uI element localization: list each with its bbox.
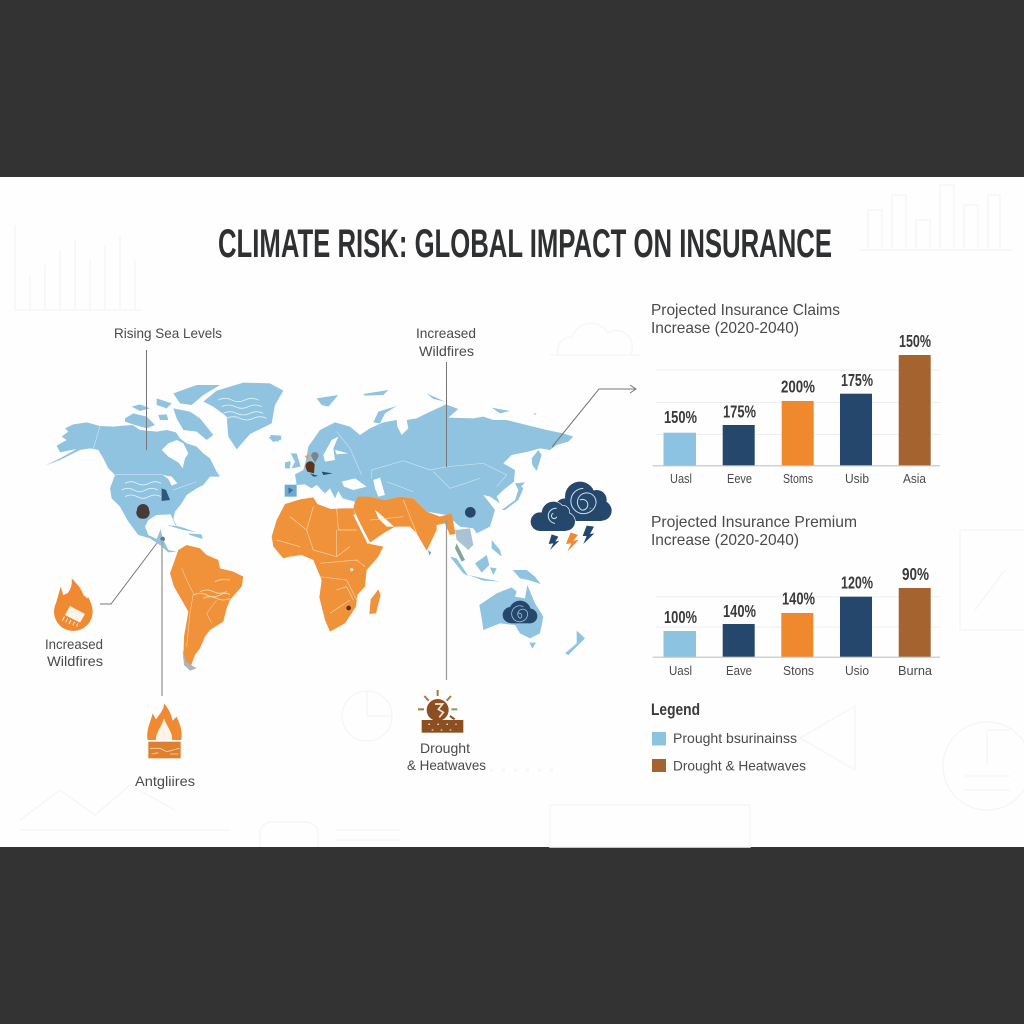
bar chart: premium: 90% xyxy=(902,564,929,584)
callout line: drought xyxy=(446,520,448,680)
South America xyxy=(170,545,243,668)
label: antgliires: Antgliires xyxy=(135,773,195,789)
Greenland xyxy=(203,383,283,449)
borders xyxy=(277,500,417,613)
Great Lakes xyxy=(163,475,177,486)
Southeast Asia xyxy=(455,528,473,550)
heading: premium chart xyxy=(651,514,857,549)
Patagonia tip xyxy=(183,649,197,671)
icon: australia cloud xyxy=(503,601,537,623)
bar chart: premium xyxy=(653,564,940,678)
bar chart: premium: 140% xyxy=(782,589,815,609)
Sakhalin and Japan xyxy=(502,450,542,510)
North America mainland xyxy=(45,422,220,552)
Red Sea xyxy=(353,514,370,544)
Baltic Sea xyxy=(323,437,348,462)
label: drought and heatwaves: & Heatwaves xyxy=(407,757,486,773)
Hudson Bay xyxy=(162,440,188,468)
map: North America xyxy=(45,385,220,552)
bar chart: claims: 150% xyxy=(664,407,697,427)
label: increased wildfires north: Wildfires xyxy=(419,343,474,359)
Caribbean islands xyxy=(167,525,203,539)
bar chart: claims: Stoms xyxy=(783,472,813,486)
dot markers xyxy=(465,507,476,518)
heading: premium chart: Increase (2020-2040) xyxy=(651,532,799,549)
label: increased wildfires left: Wildfires xyxy=(47,653,103,669)
Black Sea xyxy=(342,478,367,490)
icon: wildfire badge xyxy=(54,578,93,631)
Eurasia mainland xyxy=(295,404,573,533)
label: increased wildfires north: Increased xyxy=(416,325,476,341)
callout line: increased wildfires north xyxy=(446,362,448,467)
white panel xyxy=(0,177,1024,847)
bar chart: premium: 120% xyxy=(841,573,873,593)
icon: sun over dry ground xyxy=(418,690,463,733)
heading: claims chart xyxy=(651,302,840,337)
label: increased wildfires left xyxy=(45,636,103,669)
Madagascar xyxy=(369,589,381,614)
Arabia and South Asia xyxy=(353,497,455,551)
waves and borders xyxy=(93,426,197,498)
dark spots xyxy=(136,504,150,519)
label: increased wildfires north xyxy=(416,325,476,359)
bar chart: claims: Eeve xyxy=(727,472,752,486)
bar chart: premium: 140% xyxy=(723,601,756,621)
bar chart: claims xyxy=(653,331,940,486)
Malay peninsula xyxy=(455,543,465,562)
Africa xyxy=(272,497,383,632)
bar chart: claims: Asia xyxy=(903,472,926,486)
callout line: antgliires xyxy=(161,540,163,696)
Persian Gulf xyxy=(375,510,394,527)
bar chart: claims: Uasl xyxy=(670,472,692,486)
legend xyxy=(651,701,806,774)
legend: Legend xyxy=(651,701,700,719)
Iberia xyxy=(285,485,297,497)
bar chart: claims: Usib xyxy=(845,472,869,486)
South America rivers xyxy=(182,568,230,647)
map: Oceania xyxy=(450,540,585,655)
world map xyxy=(45,383,585,671)
Tasmania and New Zealand xyxy=(529,631,585,655)
Arctic islands xyxy=(125,385,220,440)
icon: storm clouds xyxy=(530,482,612,552)
label: rising sea levels: Rising Sea Levels xyxy=(114,325,222,341)
legend: Drought & Heatwaves xyxy=(673,758,806,774)
map: Eurasia xyxy=(270,390,573,533)
arrow to charts xyxy=(552,385,636,447)
map: Greenland and South America xyxy=(170,383,283,671)
callout line: left wildfire badge xyxy=(100,543,157,604)
bar chart: claims: 200% xyxy=(781,376,815,396)
bar chart: premium: Burna xyxy=(898,664,932,678)
bar chart: claims: 175% xyxy=(723,402,756,422)
heading: claims chart: Increase (2020-2040) xyxy=(651,320,799,337)
bar chart: premium: Eave xyxy=(726,664,752,678)
label: drought and heatwaves xyxy=(407,740,486,773)
label: drought and heatwaves: Drought xyxy=(420,740,470,756)
label: increased wildfires left: Increased xyxy=(45,636,103,652)
heading: claims chart: Projected Insurance Claims xyxy=(651,302,840,319)
Greenland waves xyxy=(218,398,267,420)
bar chart: premium: Uasl xyxy=(669,664,692,678)
Caspian Sea xyxy=(373,478,385,497)
callout line: rising sea levels xyxy=(146,350,148,450)
heading: premium chart: Projected Insurance Premium xyxy=(651,514,857,531)
Iceland-like island xyxy=(269,435,282,442)
Indonesia and Philippines xyxy=(450,540,541,584)
British Isles and Iceland xyxy=(270,435,301,468)
Australia xyxy=(479,585,543,638)
bar chart: premium: Stons xyxy=(783,664,814,678)
bar chart: claims: 150% xyxy=(899,331,931,351)
dark spots in Europe xyxy=(288,452,333,494)
borders xyxy=(337,432,507,492)
Arctic islands xyxy=(317,390,537,423)
Sri Lanka xyxy=(428,550,431,555)
bar chart: claims: 175% xyxy=(841,370,873,390)
bar chart: premium: 100% xyxy=(664,607,697,627)
bar chart: premium: Usio xyxy=(845,664,869,678)
map: Africa and South Asia xyxy=(272,497,476,632)
legend: Prought bsurinainss xyxy=(673,730,797,746)
icon: fire on ground xyxy=(147,703,182,758)
